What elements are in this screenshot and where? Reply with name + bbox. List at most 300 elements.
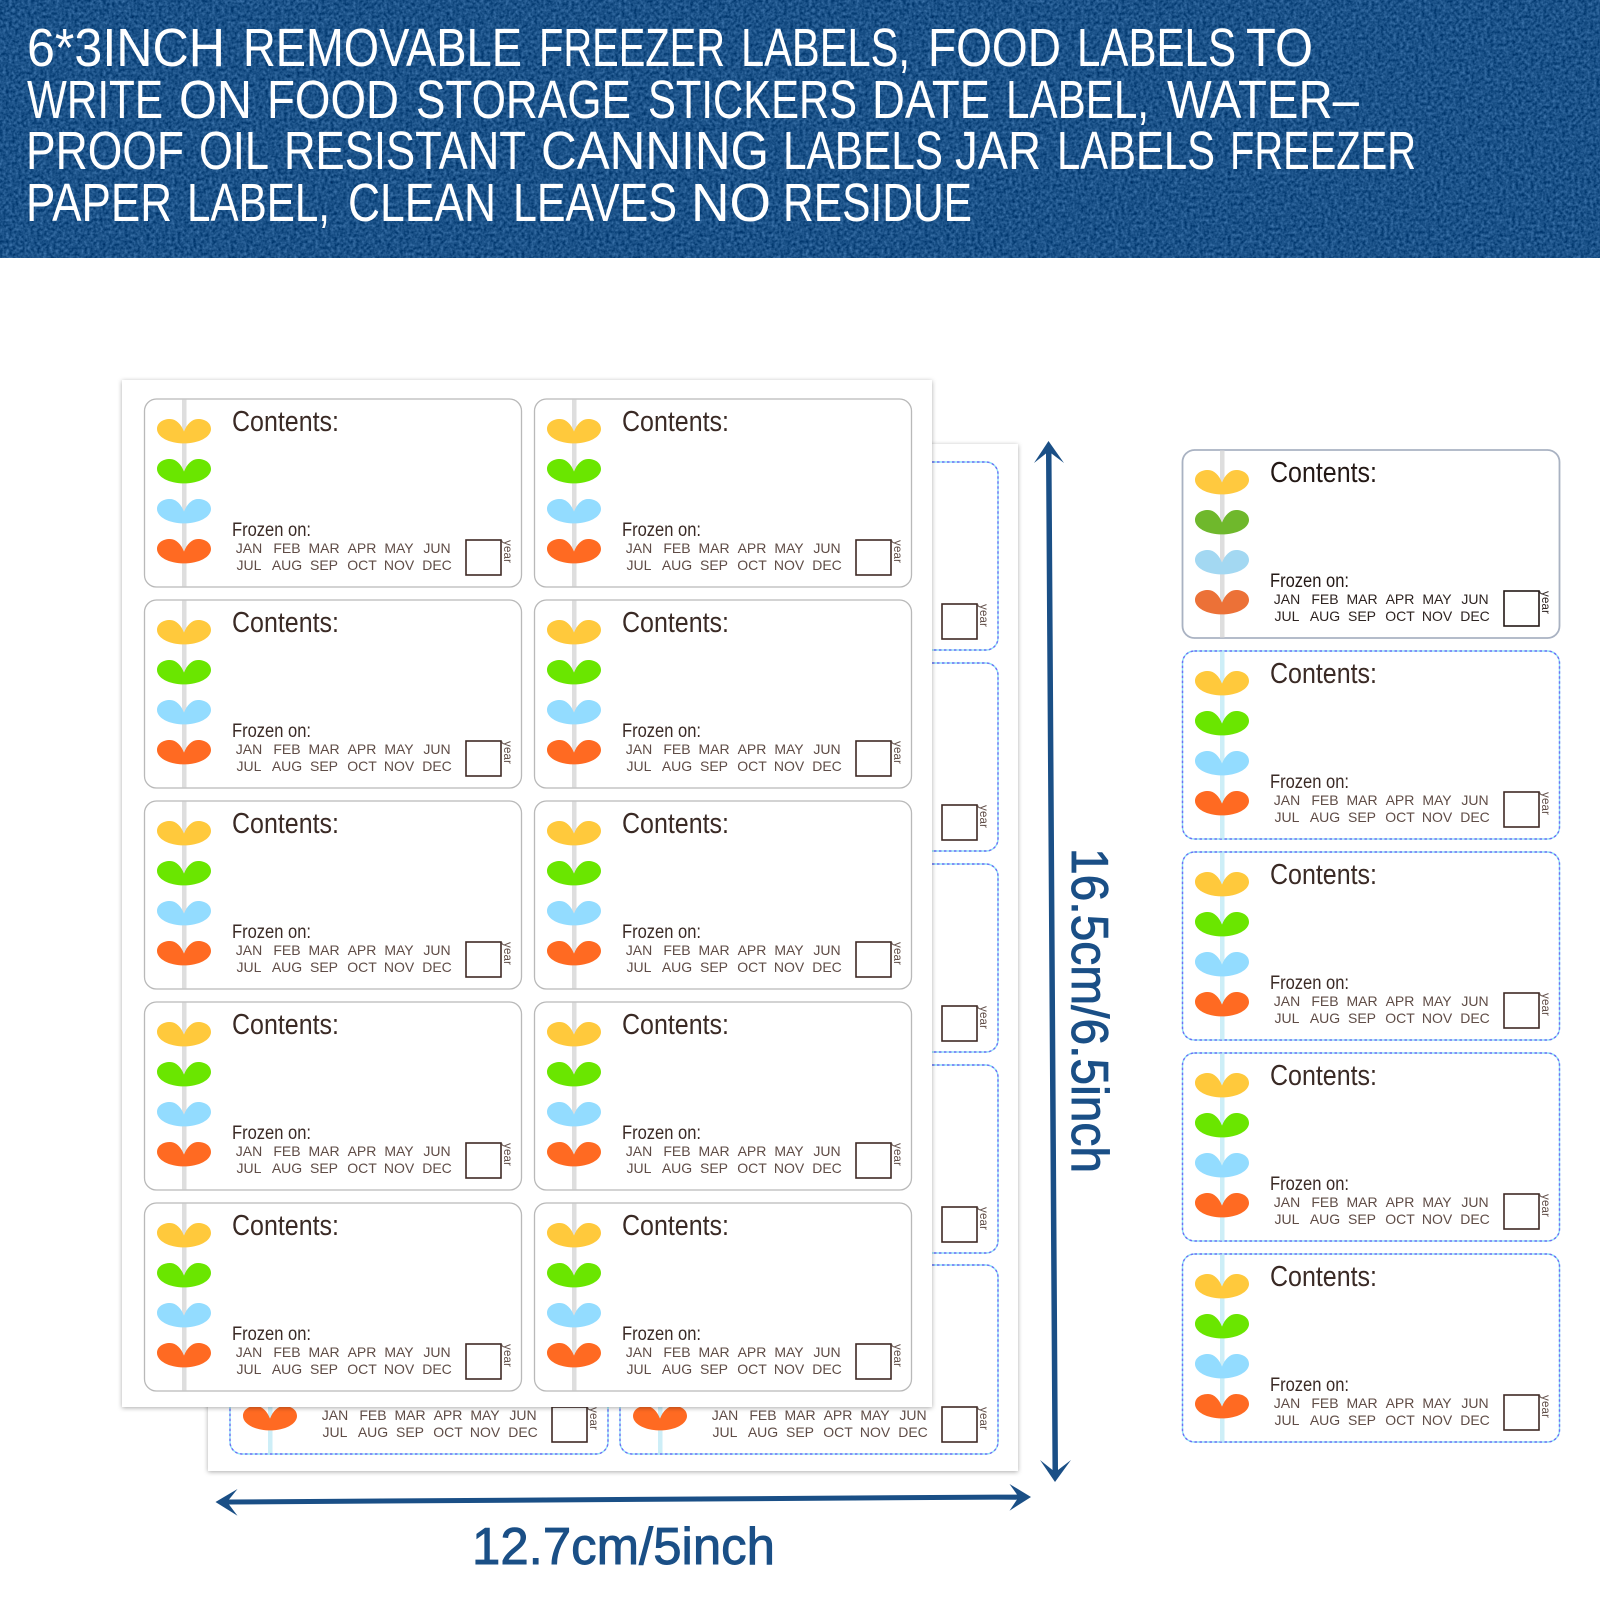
front label 6: MAR [698,942,730,958]
front label 8: OCT [737,1160,767,1176]
sample label 2: FEB [1311,792,1339,808]
front label 6: APR [738,942,766,958]
front label 9: AUG [272,1361,302,1377]
front label 10: FEB [663,1344,691,1360]
title: CANNING [541,121,769,181]
back label row 5 right: NOV [860,1424,891,1440]
sample label 4: AUG [1310,1211,1340,1227]
sample label 5 [1182,1254,1560,1442]
front label 2: SEP [700,557,728,573]
front label 6 [534,801,912,989]
front label 4: Contents: [622,607,729,639]
sample label 2: SEP [1348,809,1376,825]
front label 7: MAR [308,1143,340,1159]
title: 6*3INCH [27,18,225,78]
front label 2: JUL [627,557,652,573]
front label 9 [144,1203,522,1391]
sample label 5: OCT [1385,1412,1415,1428]
front label 1: FEB [273,540,301,556]
front label 7: FEB [273,1143,301,1159]
front label 1: JUN [423,540,451,556]
back label row 5 right: SEP [786,1424,814,1440]
front label 10: MAR [698,1344,730,1360]
back label row 4 right: year [977,1207,989,1230]
sample label 2: JUN [1461,792,1489,808]
front label 3: MAR [308,741,340,757]
front label 7: NOV [384,1160,415,1176]
title: PAPER [26,173,172,233]
front label 5 [144,801,522,989]
sample label 4: FEB [1311,1194,1339,1210]
sample label 2 [1182,651,1560,839]
header banner [0,0,1600,258]
front label 5: OCT [347,959,377,975]
title: LABELS [1057,121,1215,181]
sample label 1 (muted print): JUL [1275,608,1300,624]
front label 5: DEC [422,959,452,975]
title: CLEAN [348,173,496,233]
sample label 4: APR [1386,1194,1414,1210]
front label 10: AUG [662,1361,692,1377]
front label 9: APR [348,1344,376,1360]
title: PROOF [26,121,184,181]
front label 10: SEP [700,1361,728,1377]
sample label 3: FEB [1311,993,1339,1009]
sample label 5: year [1539,1395,1551,1418]
front label 8: JUN [813,1143,841,1159]
title: REMOVABLE [243,18,522,78]
front label 10: APR [738,1344,766,1360]
sample label 3: JUN [1461,993,1489,1009]
front label 9: JUL [237,1361,262,1377]
front label 7: JUN [423,1143,451,1159]
front label 10: OCT [737,1361,767,1377]
title: WRITE [27,70,163,130]
front label 1: DEC [422,557,452,573]
sample label 2: DEC [1460,809,1490,825]
front label 1 [144,399,522,587]
title: JAR [955,121,1041,181]
back label row 5 left [230,1265,608,1454]
title: LEAVES [513,173,677,233]
front label 2: Contents: [622,406,729,438]
front label 7 [144,1002,522,1190]
front label 9: Contents: [232,1210,339,1242]
sample label 1 (muted print): DEC [1460,608,1490,624]
front label 7: SEP [310,1160,338,1176]
front label 1: NOV [384,557,415,573]
sample label 1 (muted print): OCT [1385,608,1415,624]
front label 9: NOV [384,1361,415,1377]
back label row 5 right: OCT [823,1424,853,1440]
height label: 16.5cm/6.5inch [1060,848,1118,1173]
front label 7: Frozen on: [232,1122,311,1144]
sample label 2: Contents: [1270,658,1377,690]
back label row 4 right [620,1065,998,1253]
front label 9: FEB [273,1344,301,1360]
front label 10: Frozen on: [622,1323,701,1345]
sample label 2: APR [1386,792,1414,808]
sample label 5: FEB [1311,1395,1339,1411]
front label 8: JAN [626,1143,652,1159]
front label 8: MAR [698,1143,730,1159]
front label 9: Frozen on: [232,1323,311,1345]
front label 1: APR [348,540,376,556]
front label 5: year [501,942,513,965]
arrow: height dimension [1034,441,1071,1482]
title: DATE [872,70,990,130]
front label 2: APR [738,540,766,556]
sample label 1 (muted print): MAR [1346,591,1378,607]
front label 8: JUL [627,1160,652,1176]
title: STORAGE [416,70,631,130]
front label 10: MAY [774,1344,804,1360]
front label 4: SEP [700,758,728,774]
sample label 5: JUN [1461,1395,1489,1411]
front label 7: OCT [347,1160,377,1176]
front label 3: APR [348,741,376,757]
back label row 1 right [620,462,998,650]
front label 8: NOV [774,1160,805,1176]
front label 5: APR [348,942,376,958]
sample label 4: DEC [1460,1211,1490,1227]
back label row 5 right: JUL [713,1424,738,1440]
front label 6: FEB [663,942,691,958]
front label 6: year [891,942,903,965]
front label 3: OCT [347,758,377,774]
front label 8: MAY [774,1143,804,1159]
sample label 3: MAR [1346,993,1378,1009]
front label 8: AUG [662,1160,692,1176]
front label 4: Frozen on: [622,720,701,742]
sample label 2: AUG [1310,809,1340,825]
sample label 4: JAN [1274,1194,1300,1210]
title: FOOD [267,70,399,130]
front label 9: year [501,1344,513,1367]
sample label 2: JAN [1274,792,1300,808]
back label row 5 right: MAR [784,1407,816,1423]
sample label 4: JUN [1461,1194,1489,1210]
title: TO [1246,18,1313,78]
sample label 1 (muted print): JAN [1274,591,1300,607]
front label 5: FEB [273,942,301,958]
sample label 3: NOV [1422,1010,1453,1026]
front label 4: AUG [662,758,692,774]
sample label 5: SEP [1348,1412,1376,1428]
sample label 1 (muted print): AUG [1310,608,1340,624]
front label 5: JUL [237,959,262,975]
sample label 2: year [1539,792,1551,815]
front label 6: OCT [737,959,767,975]
sample label 3: AUG [1310,1010,1340,1026]
sample label 1 (muted print): Contents: [1270,457,1377,489]
sample label 5: JAN [1274,1395,1300,1411]
front label 9: JUN [423,1344,451,1360]
front label 7: MAY [384,1143,414,1159]
front label 8: DEC [812,1160,842,1176]
front label 4: year [891,741,903,764]
front label 10: JUN [813,1344,841,1360]
back label row 5 left: MAY [470,1407,500,1423]
width label: 12.7cm/5inch [472,1518,775,1576]
title: LABELS [1077,18,1236,78]
back label row 5 right: MAY [860,1407,890,1423]
front label 3: Frozen on: [232,720,311,742]
front label 7: year [501,1143,513,1166]
back label row 2 right [620,663,998,851]
front label 9: JAN [236,1344,262,1360]
front label 4: OCT [737,758,767,774]
front label 8 [534,1002,912,1190]
front label 6: AUG [662,959,692,975]
front label 3: AUG [272,758,302,774]
title: NO [691,173,771,233]
sample label 3: year [1539,993,1551,1016]
sample label 2: Frozen on: [1270,771,1349,793]
back label row 5 right: JUN [899,1407,927,1423]
title: LABELS [783,121,943,181]
front label 8: FEB [663,1143,691,1159]
front label 6: JUL [627,959,652,975]
front label 5: Frozen on: [232,921,311,943]
front label 7: JUL [237,1160,262,1176]
back label row 3 right [620,864,998,1052]
back label row 5 right: APR [824,1407,852,1423]
title: FREEZER [1230,121,1416,181]
sample label 4: MAR [1346,1194,1378,1210]
front label 1: JUL [237,557,262,573]
front label 2: MAY [774,540,804,556]
front label 2: AUG [662,557,692,573]
sample label 4: SEP [1348,1211,1376,1227]
front label 4: MAR [698,741,730,757]
front label 3: FEB [273,741,301,757]
sample label 4: OCT [1385,1211,1415,1227]
front label 1: AUG [272,557,302,573]
front label 10: DEC [812,1361,842,1377]
sample label 2: JUL [1275,809,1300,825]
back label row 5 left: AUG [358,1424,388,1440]
sample label 5: AUG [1310,1412,1340,1428]
sample label 5: Contents: [1270,1261,1377,1293]
front label 9: MAR [308,1344,340,1360]
title [26,18,1416,233]
sample label 4: Frozen on: [1270,1173,1349,1195]
back label row 2 right: year [977,805,989,828]
front label 5: JUN [423,942,451,958]
back label row 1 right: year [977,604,989,627]
right column sample labels [1182,450,1560,1442]
sample label 1 (muted print): APR [1386,591,1414,607]
back label row 5 left: FEB [359,1407,387,1423]
front label 6: JAN [626,942,652,958]
back label row 5 left: APR [434,1407,462,1423]
sample label 3: JAN [1274,993,1300,1009]
front label 1: JAN [236,540,262,556]
front label 4: JAN [626,741,652,757]
sample label 3: Contents: [1270,859,1377,891]
sample label 4: MAY [1422,1194,1452,1210]
front label 10: JUL [627,1361,652,1377]
front label 1: Frozen on: [232,519,311,541]
arrow: width dimension [216,1484,1031,1516]
front label 4: JUL [627,758,652,774]
front label 5: MAR [308,942,340,958]
back label row 5 right: year [977,1407,989,1430]
front label 3: year [501,741,513,764]
sample label 3: MAY [1422,993,1452,1009]
sample label 4: year [1539,1194,1551,1217]
front label 9: MAY [384,1344,414,1360]
front label 2: FEB [663,540,691,556]
front label 4: APR [738,741,766,757]
back label row 5 left: JUL [323,1424,348,1440]
sample label 3: JUL [1275,1010,1300,1026]
front label sheet [122,380,932,1407]
sample label 1 (muted print) [1182,450,1560,638]
title: FREEZER [539,18,725,78]
back label row 5 right: AUG [748,1424,778,1440]
sample label 3: OCT [1385,1010,1415,1026]
title: OIL [199,121,269,181]
sample label 1 (muted print): SEP [1348,608,1376,624]
front label 9: SEP [310,1361,338,1377]
front label 3: JUN [423,741,451,757]
back label row 5 left: SEP [396,1424,424,1440]
sample label 1 (muted print): FEB [1311,591,1339,607]
front label 2: year [891,540,903,563]
front label 4: NOV [774,758,805,774]
sample label 3 [1182,852,1560,1040]
front label 8: Contents: [622,1009,729,1041]
sample label 1 (muted print): year [1539,591,1551,614]
front label 3: JAN [236,741,262,757]
front label 6: JUN [813,942,841,958]
sample label 3: Frozen on: [1270,972,1349,994]
front label 1: MAR [308,540,340,556]
front label 4 [534,600,912,788]
title: LABEL, [1006,70,1149,130]
front label 10: Contents: [622,1210,729,1242]
sample label 5: Frozen on: [1270,1374,1349,1396]
title: RESIDUE [783,173,972,233]
sample label 5: JUL [1275,1412,1300,1428]
back label sheet [208,444,1018,1471]
front label 2: OCT [737,557,767,573]
front label 2: Frozen on: [622,519,701,541]
front label 6: MAY [774,942,804,958]
sample label 5: APR [1386,1395,1414,1411]
front label 2 [534,399,912,587]
sample label 1 (muted print): JUN [1461,591,1489,607]
sample label 2: NOV [1422,809,1453,825]
sample label 5: DEC [1460,1412,1490,1428]
front label 5: JAN [236,942,262,958]
front label 5: Contents: [232,808,339,840]
front label 1: OCT [347,557,377,573]
front label 10: year [891,1344,903,1367]
front label 3 [144,600,522,788]
front label 8: SEP [700,1160,728,1176]
front label 4: FEB [663,741,691,757]
sample label 4: NOV [1422,1211,1453,1227]
front label 4: JUN [813,741,841,757]
front label 7: Contents: [232,1009,339,1041]
back label row 5 left: OCT [433,1424,463,1440]
front label 9: OCT [347,1361,377,1377]
back label row 5 left: year [587,1407,599,1430]
sample label 5: NOV [1422,1412,1453,1428]
front label 3: NOV [384,758,415,774]
back label row 5 right: JAN [712,1407,738,1423]
front label 1: MAY [384,540,414,556]
back label row 3 right: year [977,1006,989,1029]
front label 8: APR [738,1143,766,1159]
sample label 2: MAR [1346,792,1378,808]
sample label 4: Contents: [1270,1060,1377,1092]
front label 7: AUG [272,1160,302,1176]
front label 10 [534,1203,912,1391]
front label 5: MAY [384,942,414,958]
title: WATER– [1167,70,1359,130]
front label 5: NOV [384,959,415,975]
front label 1: SEP [310,557,338,573]
title: RESISTANT [284,121,526,181]
front label 3: SEP [310,758,338,774]
back label row 5 right: FEB [749,1407,777,1423]
front label 2: JAN [626,540,652,556]
sample label 3: SEP [1348,1010,1376,1026]
sample label 3: APR [1386,993,1414,1009]
front label 2: JUN [813,540,841,556]
back label row 5 left: NOV [470,1424,501,1440]
front label 1: Contents: [232,406,339,438]
front label 3: MAY [384,741,414,757]
front label 3: Contents: [232,607,339,639]
sample label 4 [1182,1053,1560,1241]
sample label 2: OCT [1385,809,1415,825]
back label row 5 right [620,1265,998,1454]
title: STICKERS [648,70,857,130]
front label 6: SEP [700,959,728,975]
front label 8: year [891,1143,903,1166]
front label 6: Contents: [622,808,729,840]
front label 4: DEC [812,758,842,774]
sample label 3: DEC [1460,1010,1490,1026]
front label 6: DEC [812,959,842,975]
title: ON [179,70,252,130]
front label 8: Frozen on: [622,1122,701,1144]
front label 2: DEC [812,557,842,573]
front label 9: DEC [422,1361,452,1377]
front label 1: year [501,540,513,563]
title: FOOD [928,18,1061,78]
back label row 5 left: JUN [509,1407,537,1423]
front label 10: JAN [626,1344,652,1360]
title: LABEL, [187,173,330,233]
back label row 5 left: MAR [394,1407,426,1423]
back label row 5 left: DEC [508,1424,538,1440]
sample label 4: JUL [1275,1211,1300,1227]
sample label 2: MAY [1422,792,1452,808]
front label 7: JAN [236,1143,262,1159]
front label 5: AUG [272,959,302,975]
front label 4: MAY [774,741,804,757]
front label 6: NOV [774,959,805,975]
title: LABELS, [741,18,910,78]
front label 3: JUL [237,758,262,774]
sample label 1 (muted print): NOV [1422,608,1453,624]
